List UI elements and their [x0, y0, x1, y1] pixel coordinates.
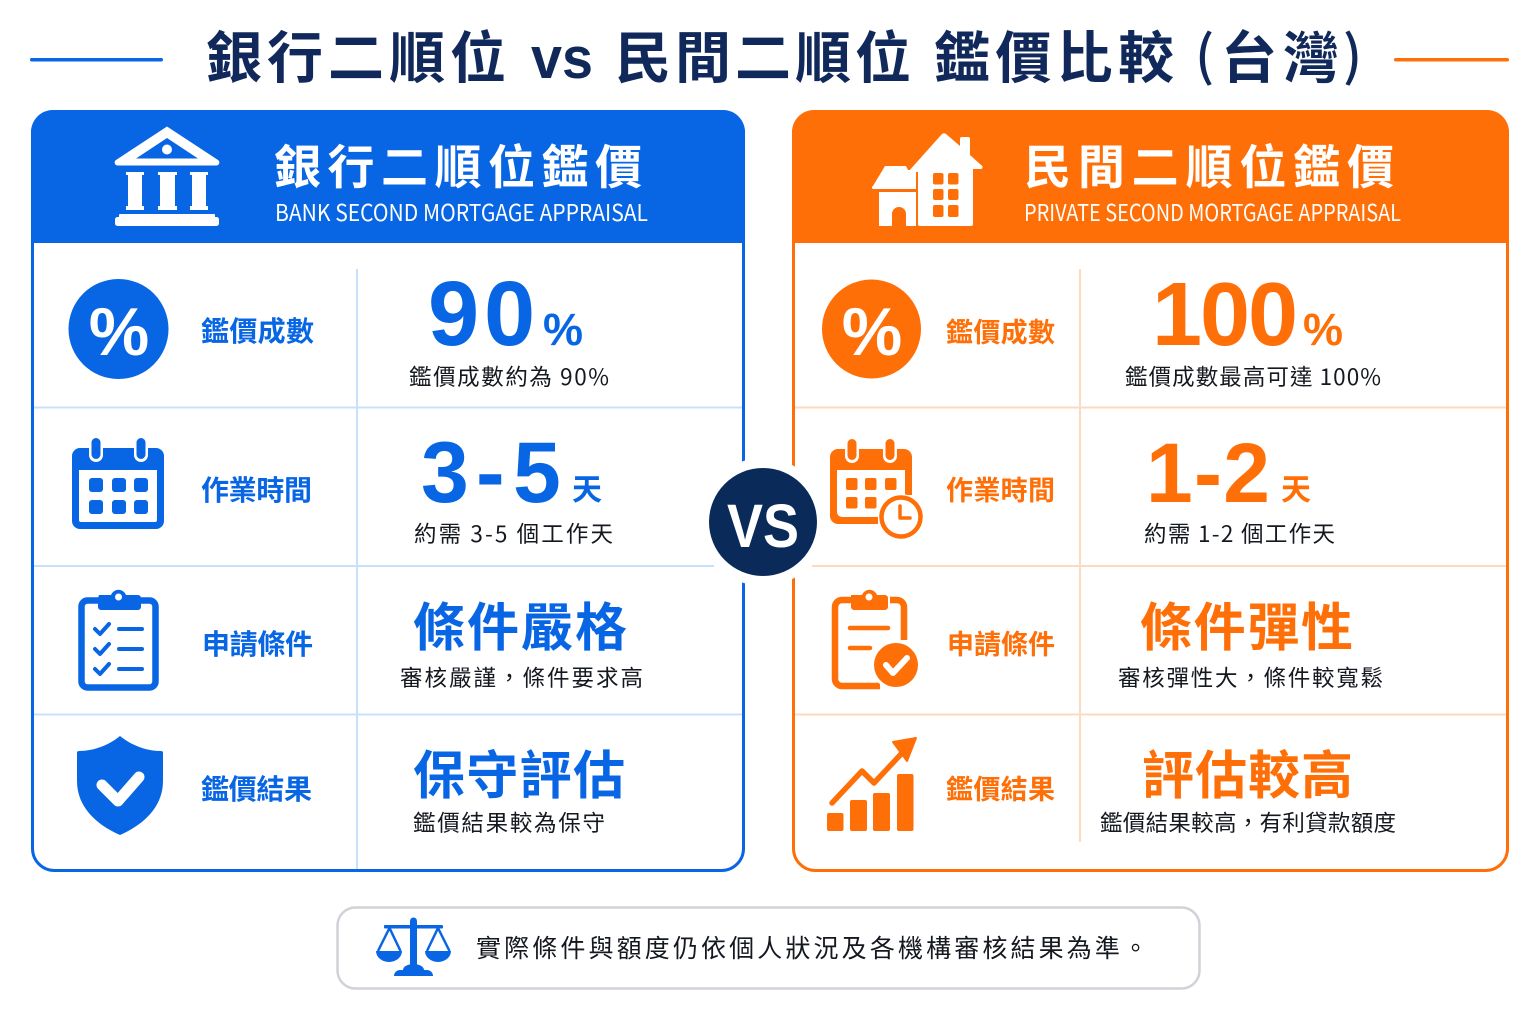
value: 1-2 days: 天 — [1281, 465, 1311, 509]
footer note — [338, 908, 1200, 988]
label: time: 作業時間 — [946, 469, 1055, 508]
value: strict: 條件嚴格 — [413, 586, 627, 661]
title: ) — [1343, 12, 1362, 91]
row: bank time — [72, 425, 613, 549]
value: 90%: 90 — [428, 263, 535, 365]
row: private ratio — [822, 265, 1381, 392]
note: conditions: 審核彈性大，條件較寬鬆 — [1118, 661, 1383, 693]
icon: rising bar chart — [827, 738, 916, 831]
icon: shield check — [77, 736, 163, 835]
title: 民間二順位 — [615, 14, 911, 95]
value: conservative: 保守評估 — [413, 734, 625, 809]
row dividers: private — [795, 269, 1506, 842]
icon: calendar — [72, 436, 164, 529]
icon: percent circle — [68, 279, 168, 379]
value: 100%: % — [1303, 304, 1343, 355]
value: flexible: 條件彈性 — [1140, 586, 1353, 661]
title: 銀行二順位 — [206, 14, 506, 95]
title: 台灣 — [1221, 14, 1339, 95]
heading: private zh: 民間二順位鑑價 — [1024, 129, 1394, 198]
value: 100%: 100 — [1152, 265, 1298, 365]
icon: percent circle — [822, 280, 921, 378]
row: private result — [827, 734, 1396, 838]
panel: bank second mortgage appraisal — [31, 110, 745, 870]
title: ( — [1195, 12, 1214, 91]
heading: private en: PRIVATE SECOND MORTGAGE APPRAISAL — [1024, 194, 1401, 228]
icon: percent circle: % — [89, 294, 149, 370]
title: 鑑價比較 — [934, 14, 1174, 95]
title rule: right — [1394, 58, 1509, 62]
note text: 實際條件與額度仍依個人狀況及各機構審核結果為準。 — [476, 929, 1148, 965]
icon: scales — [376, 918, 451, 976]
note: time: 約需 1-2 個工作天 — [1144, 517, 1335, 549]
value: 3-5 days: 3-5 — [421, 425, 561, 521]
value: higher: 評估較高 — [1142, 734, 1353, 809]
value: 3-5 days: 天 — [572, 465, 602, 509]
title — [206, 12, 1362, 95]
label: ratio: 鑑價成數 — [201, 310, 314, 350]
label: time: 作業時間 — [201, 469, 312, 509]
note: result: 鑑價結果較高，有利貸款額度 — [1100, 806, 1396, 838]
vs badge: VS — [727, 492, 799, 560]
icon: checklist clipboard — [82, 590, 156, 688]
vs badge — [699, 458, 827, 586]
panel header: bank — [31, 110, 745, 243]
label: result: 鑑價結果 — [201, 768, 312, 808]
icon: bank building — [115, 126, 219, 226]
value: 1-2 days: 1-2 — [1146, 426, 1270, 520]
label: conditions: 申請條件 — [947, 623, 1055, 662]
row: private time — [830, 426, 1335, 549]
panel header: private — [792, 110, 1509, 243]
panel: private second mortgage appraisal — [792, 110, 1509, 870]
note: ratio: 鑑價成數最高可達 100% — [1125, 360, 1381, 392]
icon: percent circle: % — [842, 294, 902, 370]
title: vs — [531, 26, 593, 91]
icon: clipboard check — [835, 590, 921, 690]
title rule: left — [30, 58, 163, 62]
label: result: 鑑價結果 — [946, 768, 1055, 807]
label: conditions: 申請條件 — [202, 623, 313, 663]
heading: bank zh: 銀行二順位鑑價 — [274, 129, 642, 198]
row dividers: bank — [34, 269, 742, 869]
row: bank result — [77, 734, 625, 838]
note: time: 約需 3-5 個工作天 — [414, 517, 613, 549]
value: 90%: % — [543, 304, 583, 355]
note: ratio: 鑑價成數約為 90% — [409, 360, 609, 392]
note: conditions: 審核嚴謹，條件要求高 — [400, 661, 643, 693]
value: 90% — [428, 263, 583, 365]
row: bank ratio — [68, 263, 609, 392]
heading: bank en: BANK SECOND MORTGAGE APPRAISAL — [275, 194, 648, 228]
icon: calendar with clock — [830, 437, 924, 540]
note: result: 鑑價結果較為保守 — [413, 806, 605, 838]
row: bank conditions — [82, 586, 643, 693]
icon: houses — [872, 133, 983, 226]
row: private conditions — [835, 586, 1383, 693]
label: ratio: 鑑價成數 — [946, 311, 1055, 350]
